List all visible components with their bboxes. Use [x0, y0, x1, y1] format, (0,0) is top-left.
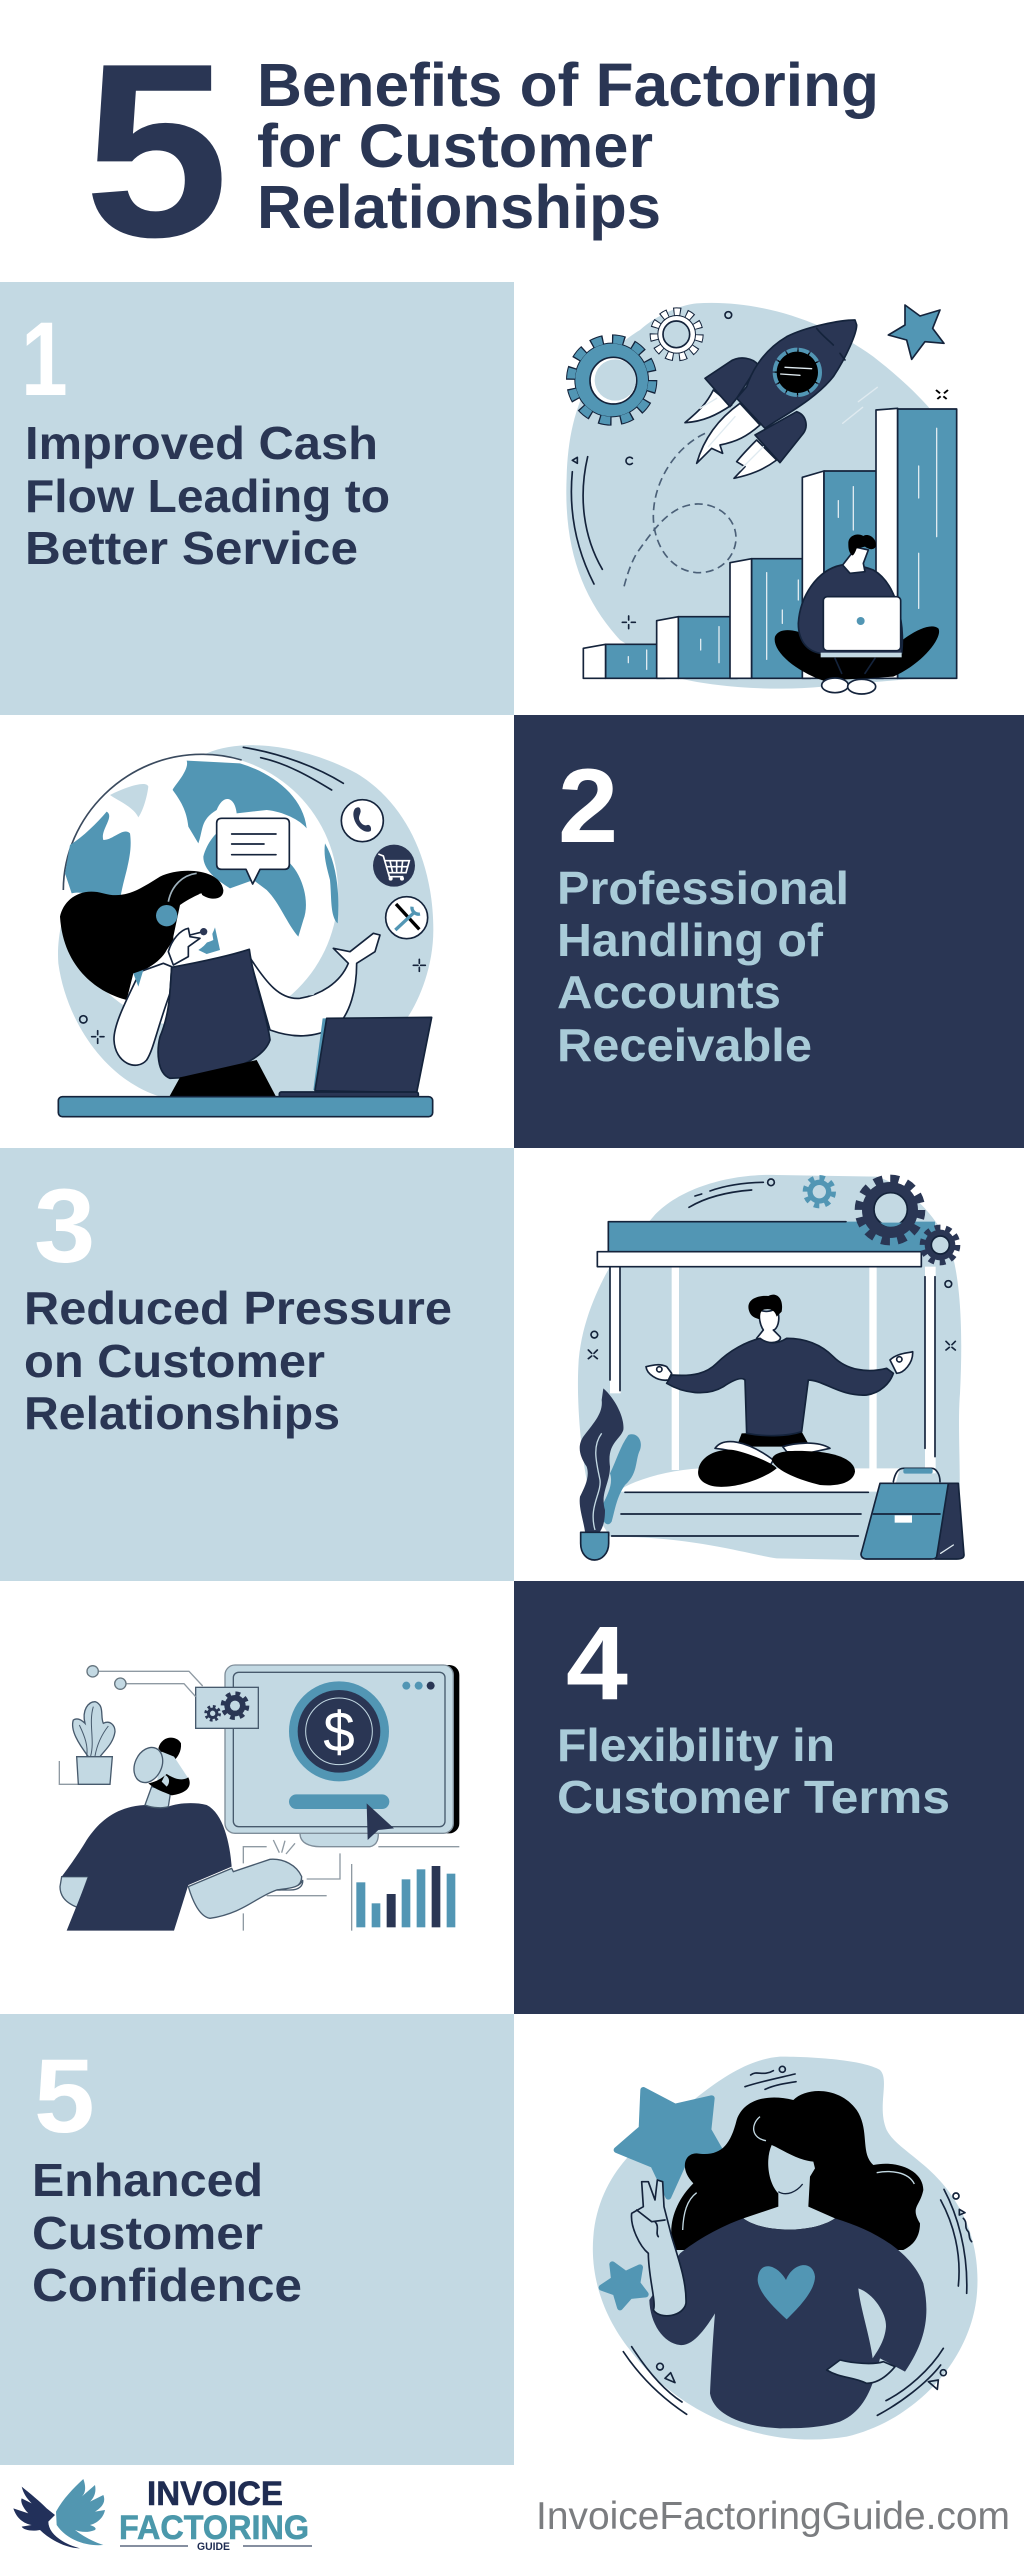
- monitor: [225, 1665, 459, 1931]
- heading: enhanced customer confidence: [32, 2154, 302, 2311]
- heading: professional handling: [557, 862, 849, 1071]
- heading: improved cash flow: Improved Cash: [25, 417, 378, 469]
- frame: [597, 1222, 936, 1536]
- icon: stars: [602, 2090, 722, 2307]
- title text: Benefits of Factoring: [257, 51, 879, 119]
- rocket: [685, 320, 877, 478]
- logo wordmark: FACTORING: [119, 2509, 309, 2547]
- dollar coin: $: [323, 1702, 355, 1765]
- dashed flight path: [624, 433, 736, 587]
- heading: enhanced customer confidence: Enhanced: [32, 2154, 263, 2206]
- logo wordmark: GUIDE: [197, 2541, 230, 2553]
- woman: [631, 2091, 926, 2428]
- desk: [58, 1097, 433, 1117]
- heading: flexibility in customer terms: [557, 1719, 950, 1823]
- icon: white gear: [654, 312, 699, 357]
- panel: benefit 1: [0, 282, 514, 715]
- meditating man: [646, 1295, 913, 1487]
- title text: Relationships: [257, 173, 661, 241]
- title: [84, 12, 879, 289]
- footer website url: InvoiceFactoringGuide.com: [536, 2495, 1010, 2538]
- man: [60, 1738, 303, 1931]
- heading: reduced pressure: [24, 1282, 452, 1439]
- illustration: confident woman with stars: [593, 2057, 977, 2440]
- panel: benefit 2: [514, 715, 1024, 1148]
- panel: benefit 3: [0, 1148, 514, 1581]
- heading: professional handling: Professional: [557, 862, 849, 914]
- heading: improved cash flow: [25, 417, 390, 574]
- icon: cursor: [367, 1803, 394, 1840]
- person with laptop: [775, 535, 939, 694]
- icon: gears box: [87, 1666, 258, 1728]
- big numeral 5: 5: [84, 12, 229, 289]
- number 1: 1: [21, 301, 68, 418]
- laptop: [279, 1017, 432, 1098]
- heading: enhanced customer confidence: Customer: [32, 2207, 263, 2259]
- heading: professional handling: Handling of: [557, 914, 824, 966]
- icon: teal gear: [571, 339, 652, 421]
- number 5: 5: [34, 2037, 95, 2155]
- heading: reduced pressure: Reduced Pressure: [24, 1282, 452, 1334]
- speech bubble: [217, 818, 289, 884]
- number 4: 4: [566, 1604, 628, 1721]
- panel: benefit 4: [514, 1581, 1024, 2014]
- plant: [580, 1388, 641, 1560]
- agent woman: [60, 871, 380, 1097]
- icon: gears: [805, 1178, 957, 1262]
- decorative marks: [623, 2066, 972, 2415]
- bar chart: [352, 1864, 455, 1931]
- heading: improved cash flow: Flow Leading to: [25, 470, 390, 522]
- number 2: 2: [558, 747, 618, 865]
- bar chart: growth bars: [583, 408, 957, 678]
- heading: improved cash flow: Better Service: [25, 522, 358, 574]
- plant: [59, 1702, 115, 1784]
- icon: briefcase: [861, 1468, 964, 1559]
- icon: tools: [386, 897, 428, 939]
- heading: enhanced customer confidence: Confidence: [32, 2259, 302, 2311]
- footer logo: [13, 2475, 312, 2553]
- illustration: man at dollar monitor: [59, 1665, 459, 1931]
- icon: shopping cart: [373, 845, 415, 887]
- number 3: 3: [34, 1167, 95, 1284]
- title text: for Customer: [257, 112, 653, 180]
- heading: reduced pressure: on Customer: [24, 1335, 325, 1387]
- dollar coin: [289, 1681, 389, 1781]
- heading: professional handling: Receivable: [557, 1019, 812, 1071]
- icon: phone: [341, 800, 383, 842]
- heading: professional handling: Accounts: [557, 966, 781, 1018]
- logo wordmark: INVOICE: [147, 2475, 283, 2513]
- logo wordmark: [119, 2475, 309, 2553]
- title text: [257, 51, 879, 241]
- illustration: meditating man: [578, 1175, 964, 1560]
- icon: eagle wings: [13, 2479, 105, 2548]
- heading: reduced pressure: Relationships: [24, 1387, 340, 1439]
- panel: benefit 5: [0, 2014, 514, 2465]
- icon: star: [888, 305, 944, 359]
- globe: [63, 754, 338, 1029]
- heading: flexibility in customer terms: Customer Terms: [557, 1771, 950, 1823]
- heading: flexibility in customer terms: Flexibility in: [557, 1719, 835, 1771]
- illustration: rocket, growth bars and person with laptop: [566, 303, 957, 694]
- illustration: customer service agent and globe: [58, 745, 433, 1117]
